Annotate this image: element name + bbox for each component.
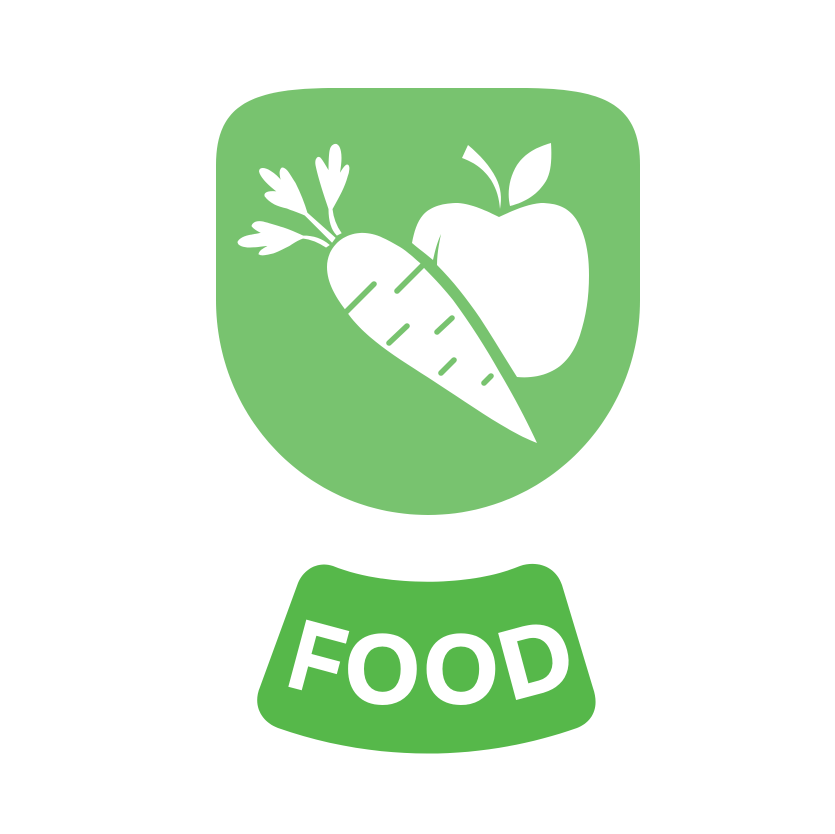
heading: FOOD bbox=[278, 596, 584, 724]
icon: carrot top frond middle bbox=[260, 168, 335, 242]
icon: carrot slashes bbox=[346, 264, 491, 383]
heading: FOOD: D bbox=[487, 596, 584, 721]
icon: carrot top frond right bbox=[316, 144, 349, 235]
heading: FOOD: O bbox=[345, 614, 420, 724]
heading: FOOD: O bbox=[424, 614, 498, 724]
icon: carrot and apple bbox=[238, 143, 589, 443]
heading: FOOD: F bbox=[278, 600, 356, 719]
icon: apple body bbox=[412, 203, 589, 377]
icon: apple leaf bbox=[509, 143, 551, 206]
icon: carrot body bbox=[327, 233, 537, 443]
panel: shield background bbox=[216, 88, 640, 515]
icon: apple stem bbox=[462, 145, 501, 209]
panel: food banner bbox=[257, 564, 596, 754]
icon: carrot top frond lower bbox=[238, 222, 329, 255]
